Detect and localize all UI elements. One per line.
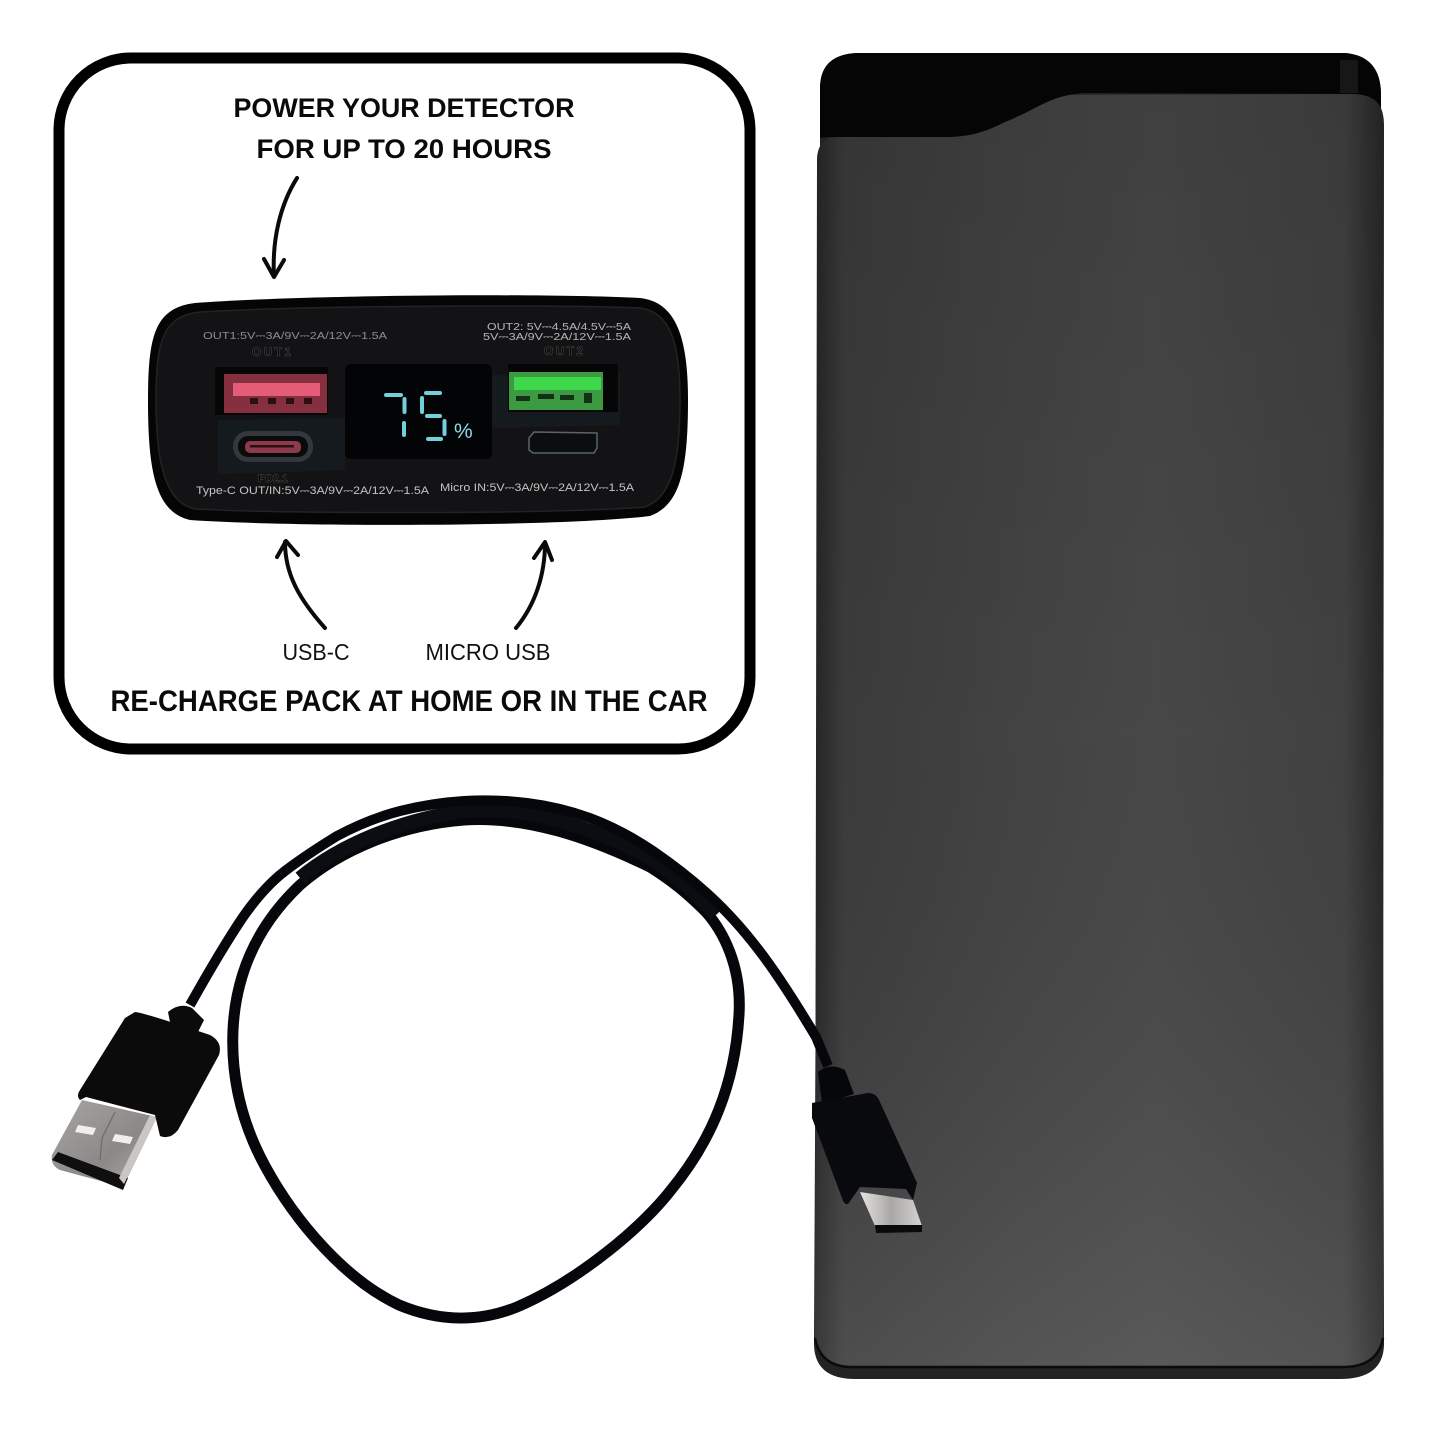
USB-C port: [233, 431, 313, 462]
cable outer strand: [190, 800, 828, 1066]
port label: micro: Micro IN:5V⎓3A/9V⎓2A/12V⎓1.5A: [440, 482, 635, 494]
port label: out2 name: OUT2: [544, 344, 583, 358]
cable merged top section: [300, 810, 716, 915]
cable loop strand: [233, 820, 739, 1318]
port face of power bank: [148, 295, 688, 525]
port label: pd: PD2.1: [258, 473, 288, 485]
arrow: to output ports: [264, 178, 297, 277]
display: 75 percent: [345, 364, 492, 459]
heading: up to 20 hours: FOR UP TO 20 HOURS: [256, 134, 552, 164]
charging cable: [52, 800, 922, 1318]
percent sign: %: [454, 420, 473, 443]
heading: power your detector: POWER YOUR DETECTOR: [234, 93, 574, 123]
caption: recharge: RE-CHARGE PACK AT HOME OR IN THE CAR: [110, 685, 708, 718]
arrow: to USB-C: [277, 541, 325, 628]
port label: out2: OUT2: 5V⎓4.5A/4.5V⎓5A: [487, 322, 631, 333]
label: USB-C: USB-C: [282, 639, 350, 665]
USB-A port: red: [215, 367, 328, 415]
micro USB port: [529, 432, 597, 453]
info panel: [59, 58, 750, 749]
power bank body: [814, 53, 1384, 1379]
USB-C connector: [812, 1066, 922, 1233]
label: micro USB: MICRO USB: [426, 639, 550, 665]
port label: out1 name: OUT1: [252, 345, 291, 359]
port label: out2 ratings: 5V⎓3A/9V⎓2A/12V⎓1.5A: [483, 332, 631, 343]
USB-A port: green: [508, 364, 618, 412]
port label: type-c: Type-C OUT/IN:5V⎓3A/9V⎓2A/12V⎓1.5A: [196, 485, 430, 497]
USB-A connector: [52, 1006, 220, 1190]
arrow: to micro USB: [516, 542, 552, 628]
port label: out1: OUT1:5V⎓3A/9V⎓2A/12V⎓1.5A: [203, 330, 387, 342]
